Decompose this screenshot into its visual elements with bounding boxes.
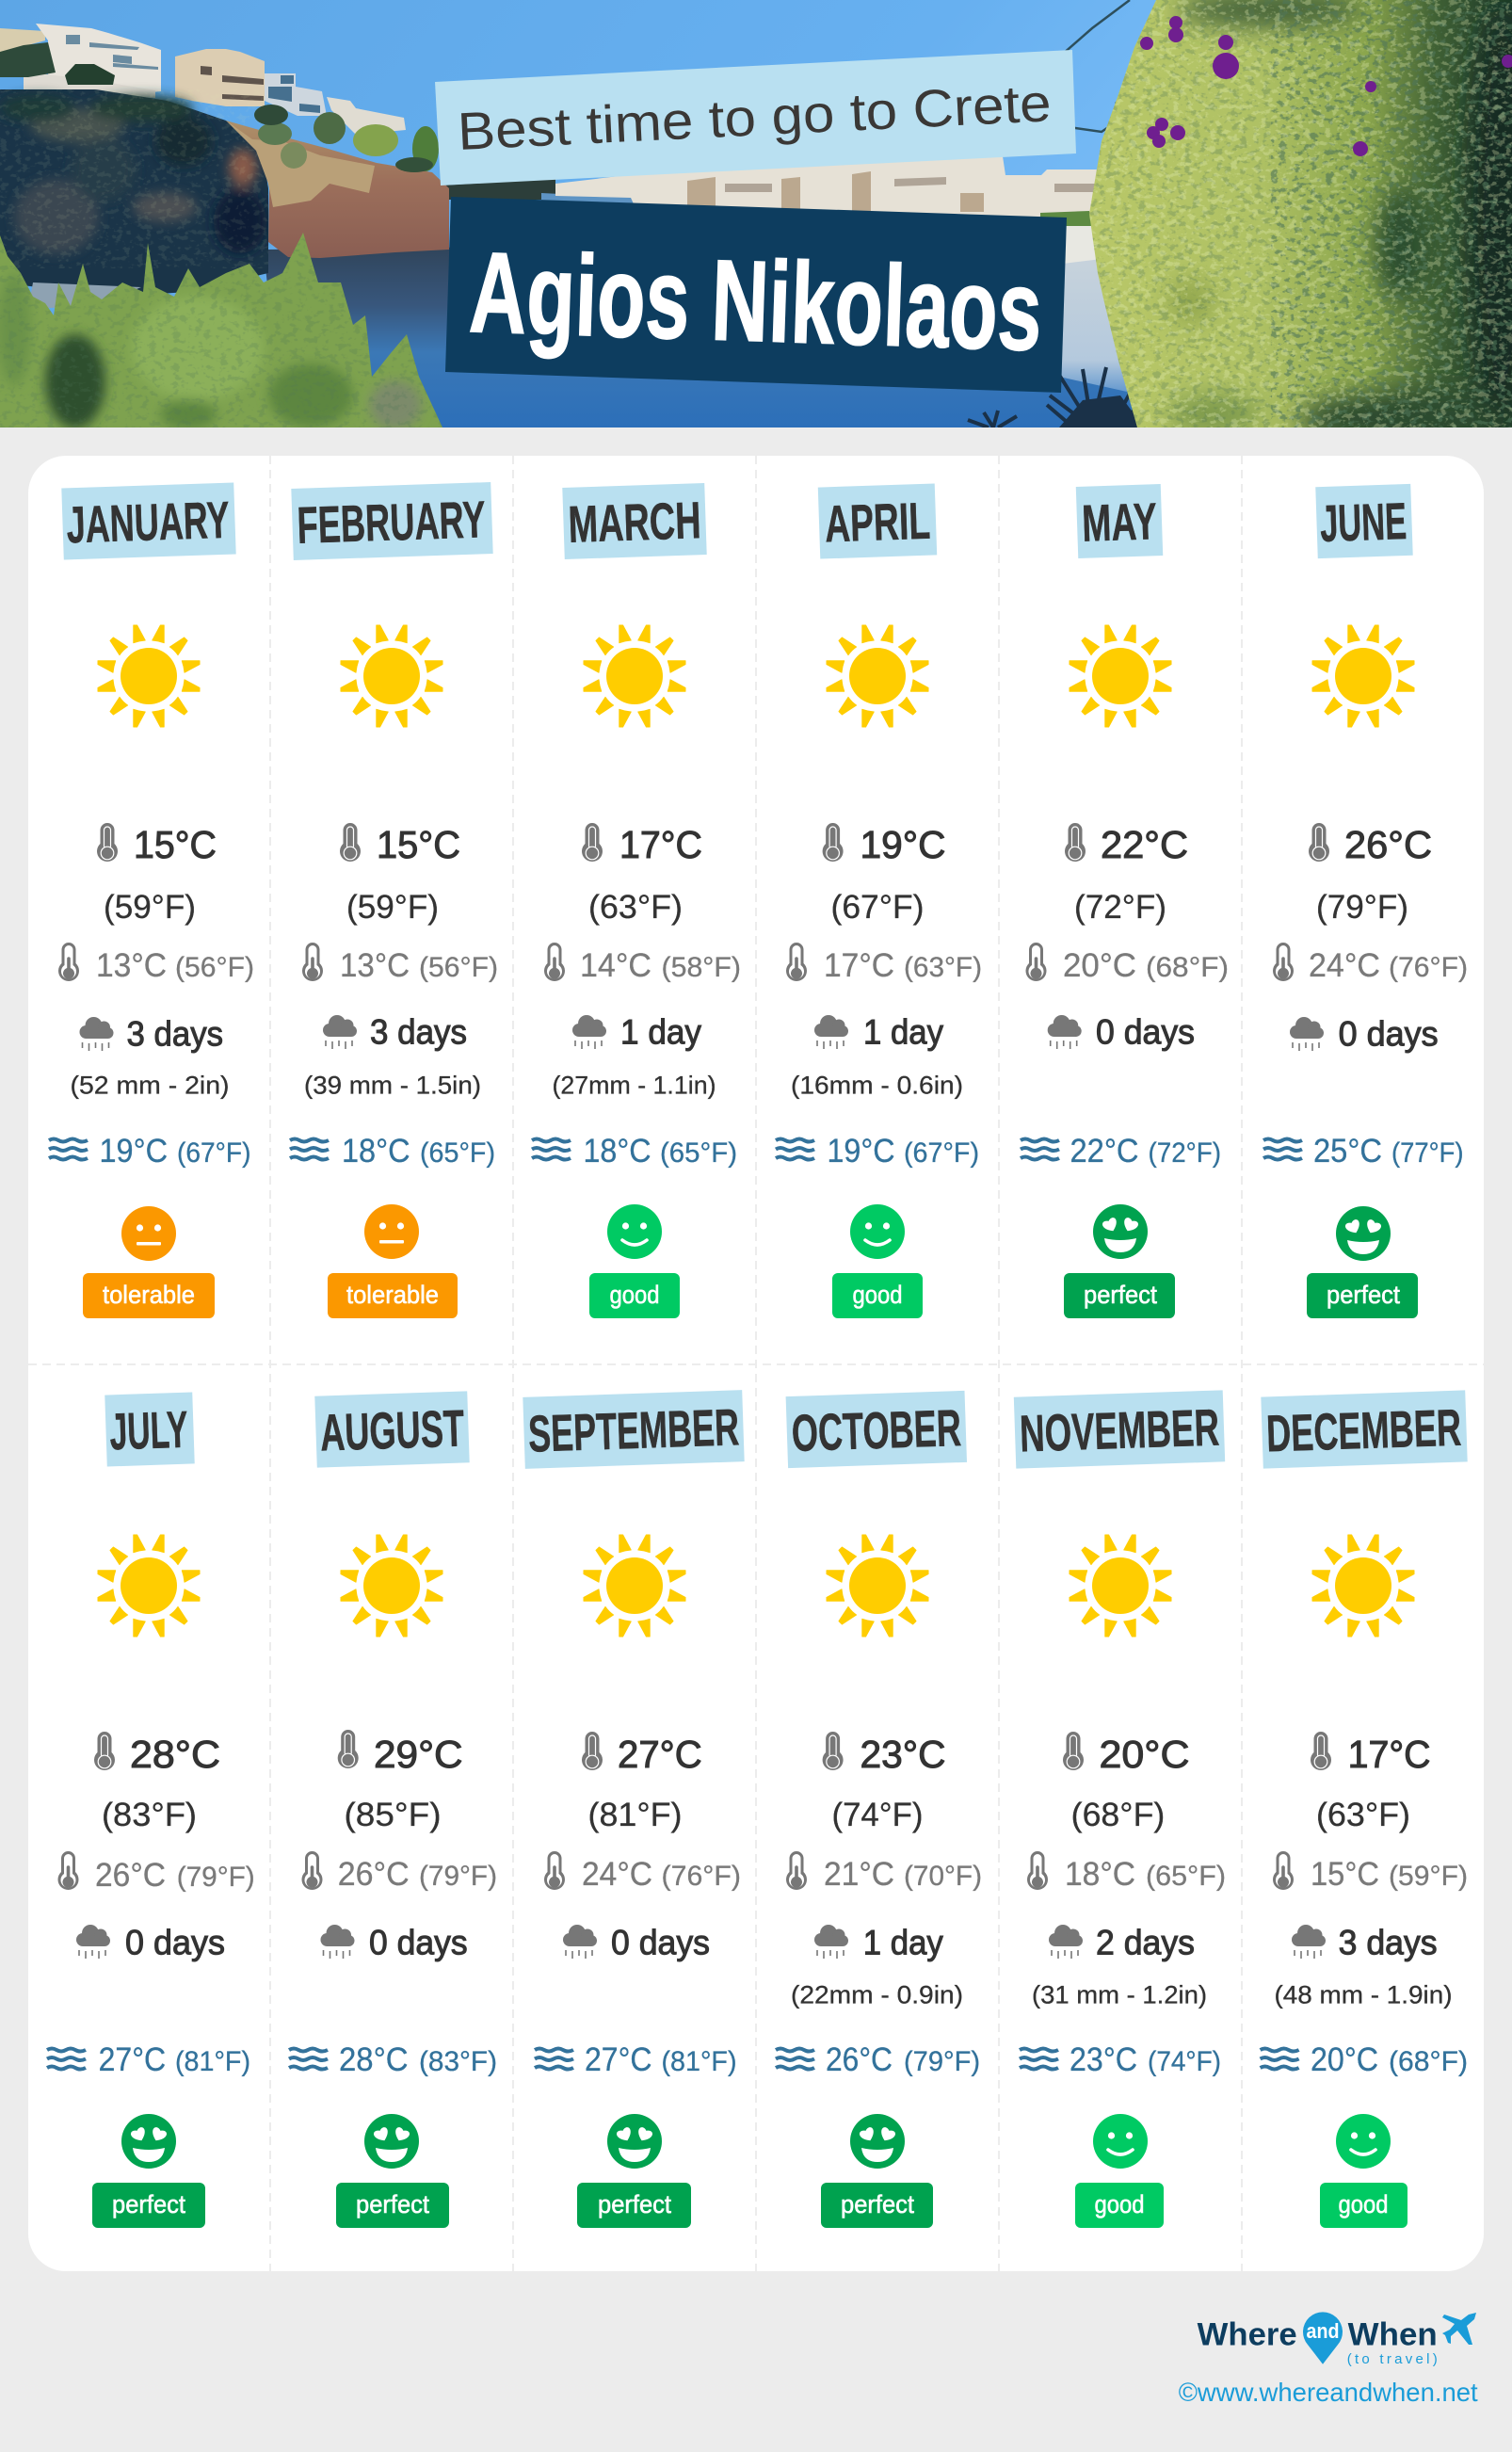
sea temperature: (79°F) bbox=[904, 2046, 980, 2077]
low temperature: 14°C bbox=[580, 947, 651, 984]
low temperature: 20°C bbox=[1063, 947, 1136, 984]
high temperature: 20°C bbox=[1100, 1733, 1190, 1776]
high temperature: 17°C bbox=[1348, 1733, 1431, 1776]
rating: perfect bbox=[1307, 1206, 1418, 1318]
icon: airplane bbox=[1442, 2313, 1476, 2345]
rainfall: 0 days bbox=[1096, 1013, 1195, 1052]
high temperature bbox=[1309, 823, 1432, 926]
low temperature: (70°F) bbox=[904, 1861, 982, 1892]
rainfall: (22mm - 0.9in) bbox=[791, 1981, 963, 2009]
month label: August: AUGUST bbox=[319, 1398, 465, 1462]
low temperature bbox=[786, 943, 982, 984]
sea temperature bbox=[1021, 1133, 1221, 1170]
rainfall bbox=[552, 1013, 716, 1100]
column: October bbox=[776, 1391, 982, 2228]
rating: good: good bbox=[853, 1281, 902, 1309]
low temperature: (79°F) bbox=[177, 1862, 255, 1893]
high temperature: (59°F) bbox=[346, 889, 439, 926]
high temperature: 15°C bbox=[377, 823, 460, 866]
high temperature: 27°C bbox=[618, 1733, 702, 1776]
rainfall: 3 days bbox=[126, 1015, 223, 1054]
month label: July bbox=[105, 1392, 195, 1467]
rainfall: 2 days bbox=[1096, 1924, 1195, 1962]
source credit: website: ©www.whereandwhen.net bbox=[1179, 2378, 1478, 2407]
sea temperature: 18°C bbox=[342, 1133, 410, 1170]
logo: Where and When: (to travel) bbox=[1347, 2351, 1438, 2367]
low temperature: 15°C bbox=[1311, 1856, 1379, 1893]
rating: perfect bbox=[821, 2114, 933, 2228]
low temperature: (76°F) bbox=[661, 1861, 741, 1892]
low temperature: (65°F) bbox=[1146, 1861, 1226, 1892]
rating: tolerable bbox=[83, 1206, 215, 1318]
icon: sun bbox=[827, 625, 928, 727]
low temperature: 26°C bbox=[95, 1857, 166, 1894]
rating: perfect bbox=[577, 2114, 691, 2228]
column: July bbox=[47, 1392, 255, 2228]
sea temperature: (81°F) bbox=[661, 2046, 736, 2077]
sea temperature bbox=[289, 2041, 497, 2078]
icon: map pin bbox=[1303, 2312, 1343, 2364]
high temperature: 29°C bbox=[374, 1733, 463, 1776]
month label: October: OCTOBER bbox=[791, 1398, 962, 1462]
month label: April: APRIL bbox=[824, 492, 931, 553]
low temperature: 17°C bbox=[824, 947, 894, 984]
icon: sun bbox=[98, 625, 200, 727]
month label: June bbox=[1315, 484, 1413, 558]
high temperature: (63°F) bbox=[588, 889, 683, 926]
sea temperature bbox=[290, 1133, 495, 1170]
rating: perfect bbox=[92, 2114, 205, 2228]
low temperature bbox=[302, 943, 498, 984]
column: June bbox=[1263, 484, 1468, 1318]
high temperature bbox=[1311, 1732, 1431, 1833]
sea temperature: (72°F) bbox=[1149, 1137, 1221, 1169]
low temperature: (76°F) bbox=[1389, 952, 1468, 983]
high temperature bbox=[582, 1732, 702, 1833]
logo: Where and When bbox=[1198, 2312, 1476, 2367]
rainfall: 1 day bbox=[863, 1013, 943, 1052]
low temperature: 13°C bbox=[96, 947, 167, 984]
rainfall: (27mm - 1.1in) bbox=[552, 1072, 716, 1100]
rainfall bbox=[791, 1924, 963, 2009]
high temperature: (68°F) bbox=[1071, 1797, 1165, 1833]
month label: September: SEPTEMBER bbox=[527, 1397, 740, 1463]
icon: sun bbox=[584, 625, 685, 727]
rainfall: 0 days bbox=[1339, 1015, 1439, 1054]
low temperature: 24°C bbox=[582, 1856, 652, 1893]
rainfall bbox=[1048, 1013, 1195, 1052]
rating: good bbox=[1320, 2114, 1407, 2228]
high temperature: (81°F) bbox=[587, 1797, 682, 1833]
high temperature: 23°C bbox=[861, 1733, 945, 1776]
month label: July: JULY bbox=[109, 1400, 189, 1460]
sea temperature bbox=[1020, 2041, 1221, 2078]
month label: November bbox=[1014, 1390, 1225, 1469]
month label: February bbox=[291, 482, 493, 560]
sea temperature bbox=[1261, 2041, 1468, 2078]
sea temperature: 22°C bbox=[1070, 1133, 1139, 1170]
sea temperature: 20°C bbox=[1311, 2041, 1378, 2078]
low temperature bbox=[1026, 943, 1229, 984]
low temperature bbox=[1273, 1851, 1468, 1893]
high temperature bbox=[340, 823, 460, 926]
sea temperature: (65°F) bbox=[420, 1137, 495, 1169]
rainfall: 1 day bbox=[620, 1013, 701, 1052]
high temperature bbox=[1065, 823, 1188, 926]
rating: good bbox=[832, 1204, 923, 1318]
sea temperature: (81°F) bbox=[175, 2046, 250, 2077]
sea temperature: (65°F) bbox=[660, 1137, 737, 1169]
title label: Best time to go to Crete: Best time to go to Crete bbox=[457, 73, 1053, 161]
rating: good: good bbox=[610, 1281, 659, 1309]
month label: March bbox=[562, 483, 707, 559]
rainfall bbox=[320, 1924, 468, 1962]
rating: tolerable bbox=[328, 1204, 458, 1318]
month label: September bbox=[523, 1390, 745, 1469]
month label: August bbox=[314, 1391, 470, 1468]
low temperature bbox=[544, 1851, 741, 1893]
header photo: Agios Nikolaos lake and cliffs bbox=[0, 0, 1512, 447]
column: April bbox=[776, 483, 982, 1318]
high temperature: (83°F) bbox=[102, 1797, 197, 1833]
sea temperature bbox=[535, 2041, 736, 2078]
rating: perfect: perfect bbox=[598, 2190, 671, 2218]
low temperature: 13°C bbox=[340, 947, 410, 984]
rainfall bbox=[791, 1013, 963, 1100]
rainfall bbox=[76, 1924, 225, 1962]
column: November bbox=[1014, 1390, 1226, 2228]
low temperature bbox=[1027, 1851, 1226, 1893]
high temperature bbox=[823, 823, 945, 926]
logo: Where and When: and bbox=[1307, 2319, 1339, 2343]
low temperature: 24°C bbox=[1309, 947, 1380, 984]
sea temperature bbox=[776, 1133, 979, 1170]
rainfall: 0 days bbox=[611, 1924, 710, 1962]
column: March bbox=[532, 483, 741, 1318]
sea temperature: (67°F) bbox=[177, 1137, 250, 1169]
sea temperature: 25°C bbox=[1313, 1133, 1382, 1170]
month label: November: NOVEMBER bbox=[1019, 1398, 1220, 1462]
low temperature: 26°C bbox=[338, 1856, 410, 1893]
rainfall: 3 days bbox=[1339, 1924, 1438, 1962]
sea temperature: 27°C bbox=[585, 2041, 651, 2078]
rating: good bbox=[1075, 2114, 1164, 2228]
rating: tolerable: tolerable bbox=[103, 1281, 195, 1309]
sea temperature: 28°C bbox=[339, 2041, 409, 2078]
rating: perfect bbox=[336, 2114, 449, 2228]
rating: good: good bbox=[1094, 2190, 1145, 2218]
column: May bbox=[1021, 484, 1229, 1318]
rainfall bbox=[1032, 1924, 1207, 2009]
rating: perfect: perfect bbox=[841, 2190, 914, 2218]
high temperature bbox=[97, 823, 217, 926]
icon: sun bbox=[98, 1535, 200, 1637]
sea temperature bbox=[1263, 1133, 1463, 1170]
panel: monthly climate card bbox=[28, 456, 1484, 2271]
high temperature: 15°C bbox=[134, 823, 217, 866]
rating: tolerable: tolerable bbox=[346, 1281, 439, 1309]
sea temperature: 19°C bbox=[100, 1133, 168, 1170]
high temperature: 26°C bbox=[1344, 823, 1432, 866]
rainfall bbox=[563, 1924, 710, 1962]
high temperature: (72°F) bbox=[1074, 889, 1166, 926]
sea temperature: (68°F) bbox=[1389, 2046, 1468, 2077]
month label: June: JUNE bbox=[1319, 492, 1407, 553]
high temperature bbox=[338, 1730, 463, 1833]
high temperature: 22°C bbox=[1101, 823, 1188, 866]
high temperature bbox=[823, 1732, 945, 1833]
icon: sun bbox=[584, 1535, 685, 1637]
rainfall: 0 days bbox=[369, 1924, 468, 1962]
title label: Agios Nikolaos bbox=[445, 197, 1067, 393]
title label: Best time to go to Crete bbox=[435, 50, 1076, 186]
rainfall: 1 day bbox=[863, 1924, 943, 1962]
column: August bbox=[289, 1391, 497, 2228]
rating: good: good bbox=[1339, 2190, 1388, 2218]
rating: perfect: perfect bbox=[112, 2190, 185, 2218]
month label: May: MAY bbox=[1081, 492, 1158, 553]
high temperature: (74°F) bbox=[832, 1797, 923, 1833]
sea temperature: 18°C bbox=[584, 1133, 651, 1170]
sea temperature: 27°C bbox=[99, 2041, 166, 2078]
icon: sun bbox=[341, 1535, 442, 1637]
sea temperature bbox=[532, 1133, 737, 1170]
low temperature: (63°F) bbox=[904, 952, 982, 983]
high temperature: (59°F) bbox=[104, 889, 196, 926]
rainfall bbox=[70, 1015, 230, 1100]
rating: perfect: perfect bbox=[356, 2190, 429, 2218]
rainfall bbox=[304, 1013, 481, 1100]
rating: good bbox=[589, 1204, 680, 1318]
high temperature bbox=[1063, 1732, 1190, 1833]
high temperature bbox=[582, 823, 702, 926]
high temperature: (79°F) bbox=[1316, 889, 1408, 926]
rainfall: (16mm - 0.6in) bbox=[791, 1072, 963, 1100]
sea temperature bbox=[49, 1133, 250, 1170]
low temperature: (56°F) bbox=[175, 952, 254, 983]
rainfall bbox=[1275, 1924, 1452, 2009]
low temperature bbox=[1273, 943, 1468, 984]
logo: Where and When: When bbox=[1348, 2317, 1438, 2353]
high temperature: 19°C bbox=[861, 823, 945, 866]
sea temperature: (77°F) bbox=[1391, 1137, 1463, 1169]
low temperature: 18°C bbox=[1065, 1856, 1135, 1893]
rainfall: (39 mm - 1.5in) bbox=[304, 1072, 481, 1100]
sea temperature bbox=[47, 2041, 250, 2078]
sea temperature: (67°F) bbox=[904, 1137, 979, 1169]
low temperature bbox=[58, 943, 254, 984]
sea temperature: 19°C bbox=[827, 1133, 894, 1170]
low temperature: (59°F) bbox=[1389, 1861, 1468, 1892]
low temperature bbox=[301, 1851, 497, 1893]
column: September bbox=[523, 1390, 745, 2228]
rainfall: (48 mm - 1.9in) bbox=[1275, 1981, 1452, 2009]
title label: Agios Nikolaos: Agios Nikolaos bbox=[468, 228, 1044, 375]
icon: sun bbox=[1070, 1535, 1171, 1637]
month label: May bbox=[1076, 484, 1163, 558]
sea temperature: (83°F) bbox=[419, 2046, 497, 2077]
sea temperature: (74°F) bbox=[1148, 2046, 1221, 2077]
low temperature: (68°F) bbox=[1146, 952, 1229, 983]
rating: perfect: perfect bbox=[1327, 1281, 1400, 1309]
sea temperature: 26°C bbox=[826, 2041, 893, 2078]
month label: February: FEBRUARY bbox=[297, 490, 487, 555]
icon: sun bbox=[1070, 625, 1171, 727]
low temperature: (58°F) bbox=[661, 952, 741, 983]
icon: sun bbox=[341, 625, 442, 727]
high temperature: (85°F) bbox=[345, 1797, 441, 1833]
logo: Where and When: Where bbox=[1198, 2317, 1297, 2353]
sea temperature bbox=[776, 2041, 980, 2078]
icon: sun bbox=[827, 1535, 928, 1637]
high temperature bbox=[94, 1732, 220, 1833]
rainfall: (52 mm - 2in) bbox=[70, 1072, 230, 1100]
low temperature bbox=[786, 1851, 982, 1893]
rainfall: 0 days bbox=[125, 1924, 225, 1962]
column: December bbox=[1261, 1390, 1468, 2228]
month label: January bbox=[61, 482, 236, 560]
low temperature: (79°F) bbox=[419, 1861, 497, 1892]
low temperature bbox=[544, 943, 741, 984]
column: January bbox=[49, 482, 254, 1318]
low temperature: (56°F) bbox=[419, 952, 498, 983]
column: February bbox=[290, 482, 498, 1318]
low temperature bbox=[58, 1851, 255, 1894]
rating: perfect: perfect bbox=[1084, 1281, 1157, 1309]
rating: perfect bbox=[1064, 1204, 1175, 1318]
rainfall: (31 mm - 1.2in) bbox=[1032, 1981, 1207, 2009]
rainfall: 3 days bbox=[370, 1013, 467, 1052]
rainfall bbox=[1290, 1015, 1439, 1054]
low temperature: 21°C bbox=[824, 1856, 894, 1893]
sea temperature: 23°C bbox=[1070, 2041, 1137, 2078]
high temperature: 28°C bbox=[130, 1733, 220, 1776]
high temperature: (67°F) bbox=[830, 889, 925, 926]
month label: October bbox=[786, 1391, 967, 1468]
icon: sun bbox=[1312, 625, 1414, 727]
icon: sun bbox=[1312, 1535, 1414, 1637]
month label: April bbox=[818, 483, 937, 559]
month label: January: JANUARY bbox=[66, 491, 231, 554]
month label: March: MARCH bbox=[568, 491, 702, 554]
high temperature: (63°F) bbox=[1316, 1797, 1410, 1833]
high temperature: 17°C bbox=[619, 823, 702, 866]
